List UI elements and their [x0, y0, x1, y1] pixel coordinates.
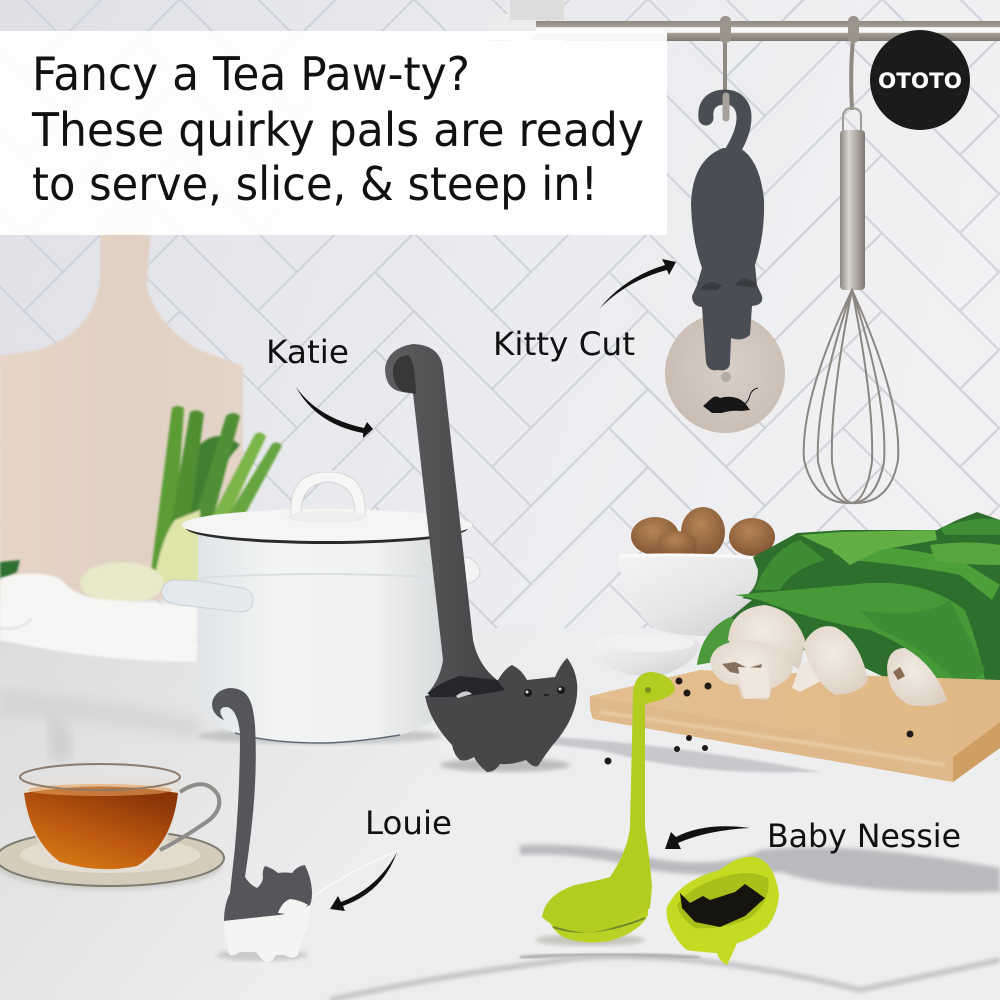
- pot left handle: [162, 580, 253, 612]
- title panel: [0, 31, 667, 235]
- bowl of potatoes: [618, 507, 775, 636]
- OTOTO logo: OTOTO: [878, 69, 962, 93]
- white pot with lid: [162, 472, 480, 744]
- label: Katie: [266, 333, 373, 438]
- title text: Fancy a Tea Paw-ty?: [32, 47, 470, 101]
- title text: These quirky pals are ready: [31, 103, 644, 157]
- fennel behind pot: [0, 406, 282, 604]
- marble counter: [0, 628, 1000, 1000]
- pile of green leaves: [697, 512, 1000, 694]
- infuser: Louie: [212, 688, 312, 962]
- title text: to serve, slice, & steep in!: [32, 157, 598, 211]
- label: Katie: Katie: [266, 333, 349, 371]
- label: Baby Nessie: [665, 817, 961, 855]
- infuser: Baby Nessie: [535, 672, 779, 965]
- pot right handle: [450, 557, 480, 590]
- OTOTO logo: [870, 30, 970, 130]
- wooden chopping board: [590, 670, 1000, 782]
- tiled wall background: [0, 0, 1000, 650]
- tea cup and saucer: [0, 764, 224, 890]
- rail and hooks: [486, 0, 1000, 110]
- pizza cutter: Kitty Cut: [665, 96, 785, 433]
- ladle: Katie: [385, 344, 577, 772]
- title text: [31, 47, 644, 211]
- label: Louie: [330, 804, 452, 911]
- mouse icon on blade: [703, 388, 758, 413]
- mushrooms: [710, 605, 947, 706]
- label: Kitty Cut: Kitty Cut: [493, 325, 635, 363]
- cutting board on wall: [0, 205, 243, 600]
- peppercorns: [604, 678, 914, 764]
- folded towel: [0, 573, 197, 662]
- whisk: [804, 108, 898, 503]
- label: Kitty Cut: [493, 259, 676, 363]
- label: Baby Nessie: Baby Nessie: [767, 817, 961, 855]
- label: Louie: Louie: [365, 804, 452, 842]
- small white dish: [595, 633, 700, 676]
